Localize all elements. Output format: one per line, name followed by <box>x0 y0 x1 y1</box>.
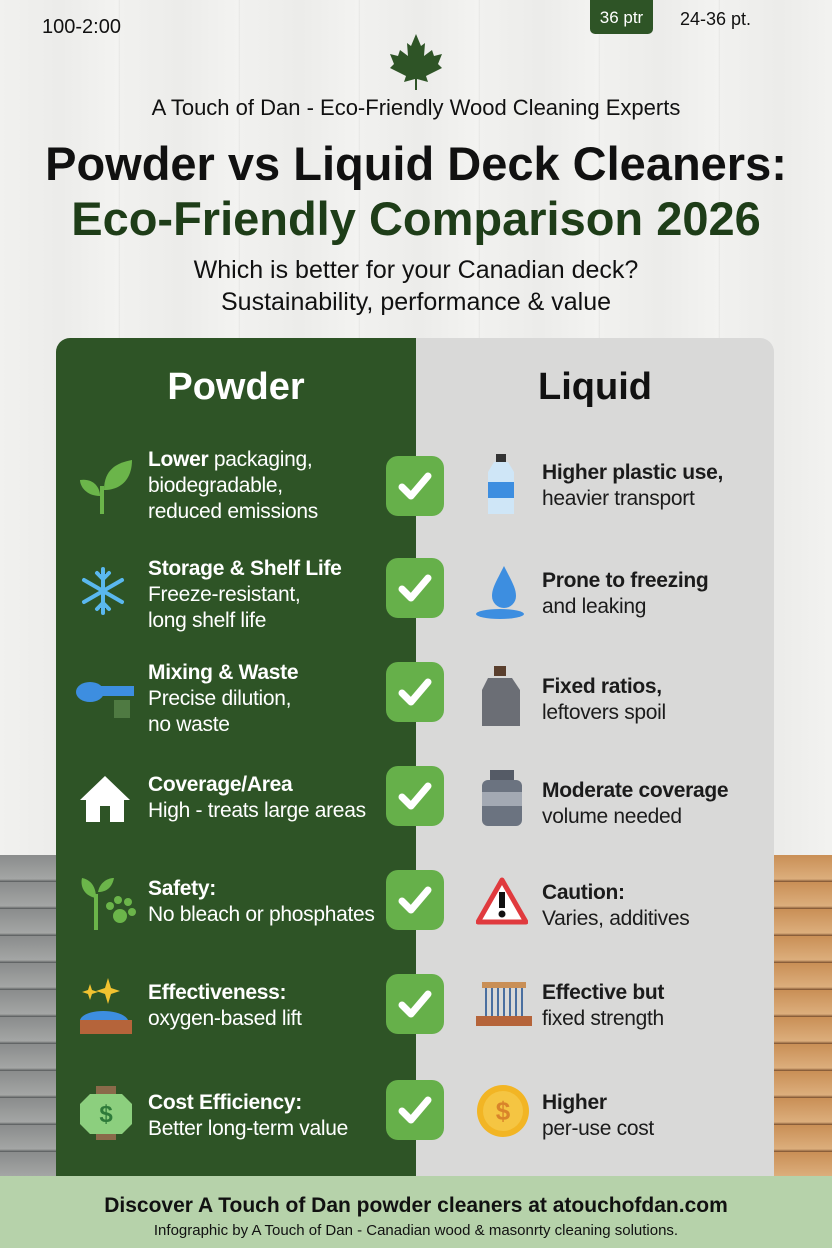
row: packaging: reduced emissions <box>148 500 318 523</box>
row: cost: $ <box>99 1101 113 1128</box>
row: storage: Prone to freezing <box>542 569 708 592</box>
row: effectiveness: Effective but <box>542 981 664 1004</box>
row: coverage: Moderate coverage <box>542 779 728 802</box>
row: coverage <box>80 766 728 828</box>
row: mixing: Fixed ratios, <box>542 675 662 698</box>
heading: Liquid: Liquid <box>538 366 652 408</box>
row: effectiveness <box>80 974 664 1034</box>
icon: maple leaf <box>390 34 442 90</box>
row: cost: Cost Efficiency: <box>148 1091 302 1114</box>
panel: liquid <box>416 338 774 1176</box>
row: storage: Storage & Shelf Life <box>148 557 342 580</box>
row: cost: $ <box>496 1096 511 1126</box>
row: storage: Freeze-resistant, <box>148 583 300 606</box>
row: safety: Varies, additives <box>542 907 689 930</box>
row: safety: No bleach or phosphates <box>148 903 375 926</box>
row: cost: Higher <box>542 1091 607 1114</box>
row: mixing: Mixing & Waste <box>148 661 298 684</box>
row: coverage: Coverage/Area <box>148 773 292 796</box>
footer band <box>0 1176 832 1248</box>
footer credit: Infographic by A Touch of Dan - Canadian wood & masonrty cleaning solutions. <box>154 1222 678 1239</box>
row: packaging: heavier transport <box>542 487 694 510</box>
row: effectiveness: fixed strength <box>542 1007 664 1030</box>
row: packaging <box>80 448 723 523</box>
comparison rows <box>76 448 728 1140</box>
row: effectiveness: Effectiveness: <box>148 981 286 1004</box>
panel: powder <box>56 338 416 1176</box>
heading: Powder: Powder <box>167 366 305 408</box>
title: Eco-Friendly Comparison 2026 <box>71 192 761 245</box>
top-right label: 24-36 pt. <box>680 9 751 29</box>
title: Powder vs Liquid Deck Cleaners: <box>45 137 787 190</box>
row: cost <box>80 1080 654 1140</box>
row: coverage: High - treats large areas <box>148 799 366 822</box>
row: effectiveness: oxygen-based lift <box>148 1007 302 1030</box>
row: safety: Caution: <box>542 881 625 904</box>
subtitle brand: A Touch of Dan - Eco-Friendly Wood Cleaning Experts <box>152 95 680 120</box>
row: mixing <box>76 661 666 736</box>
footer call to action: Discover A Touch of Dan powder cleaners at atouchofdan.com <box>104 1194 728 1217</box>
row: packaging: Lower packaging, <box>148 448 312 471</box>
row: cost: per-use cost <box>542 1117 654 1140</box>
tagline: Which is better for your Canadian deck? <box>194 256 638 284</box>
row: mixing: no waste <box>148 713 230 736</box>
row: cost: Better long-term value <box>148 1117 348 1140</box>
tagline <box>194 256 638 316</box>
row: packaging: Higher plastic use, <box>542 461 723 484</box>
badge: 36 ptr <box>600 8 643 27</box>
row: safety: Safety: <box>148 877 216 900</box>
top-left label: 100-2:00 <box>42 16 121 38</box>
row: coverage: volume needed <box>542 805 682 828</box>
tagline: Sustainability, performance & value <box>221 288 611 316</box>
row: storage <box>82 557 708 632</box>
row: storage: long shelf life <box>148 609 266 632</box>
row: safety <box>82 870 689 930</box>
row: mixing: leftovers spoil <box>542 701 666 724</box>
title <box>45 137 787 245</box>
row: mixing: Precise dilution, <box>148 687 291 710</box>
badge <box>590 0 653 34</box>
row: storage: and leaking <box>542 595 646 618</box>
row: packaging: biodegradable, <box>148 474 283 497</box>
